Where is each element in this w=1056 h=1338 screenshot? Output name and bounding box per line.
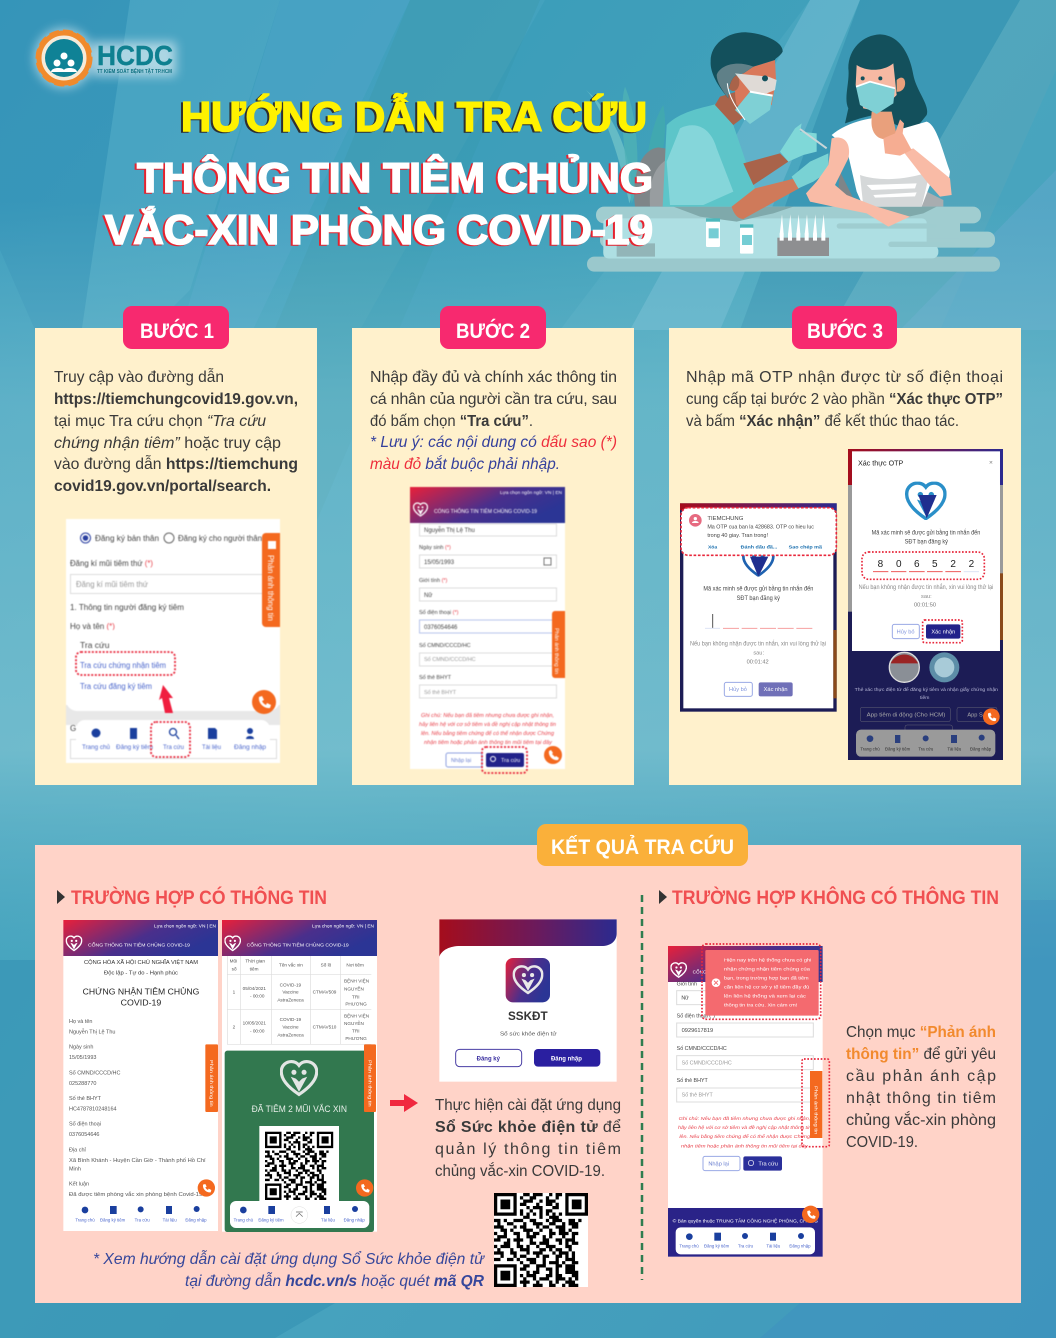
patient bbox=[806, 34, 952, 227]
screenshot: vaccination certificate: Ngày sinh bbox=[69, 1045, 93, 1051]
screenshot: no information found: Trang chủ bbox=[679, 1244, 699, 1249]
screenshot: OTP entry: Nếu bạn không nhận được tin nhắn, xin vui lòng thử lại bbox=[859, 584, 993, 591]
tab: report information bbox=[552, 611, 565, 678]
screenshot: OTP entry: SĐT bạn đăng ký bbox=[905, 540, 948, 546]
screenshot: OTP received: Nếu bạn không nhận được tin nhắn, xin vui lòng thử lại bbox=[690, 641, 826, 648]
alert: not found: lên liên hệ thống và xem lại các bbox=[724, 994, 807, 999]
screenshot: OTP entry: 5 bbox=[932, 559, 938, 570]
screenshot: vaccination table and green pass: Đăng nhập bbox=[344, 1217, 365, 1222]
table: doses: Tên vắc xin bbox=[279, 962, 303, 968]
table: doses: BỆNH VIỆN bbox=[344, 1011, 369, 1018]
screenshot: OTP received: Xác nhận bbox=[764, 687, 788, 693]
bottom navigation: Đăng ký tiêm bbox=[116, 744, 153, 751]
table: doses: - 00:00 bbox=[250, 1028, 265, 1033]
screenshot: step 2 lookup form: Lựa chọn ngôn ngữ: VN | EN bbox=[500, 490, 562, 495]
table: doses: CTMAV509 bbox=[313, 990, 337, 995]
screenshot: vaccination certificate: Địa chỉ bbox=[69, 1146, 87, 1153]
screenshot: OTP entry: Đăng nhập bbox=[970, 746, 992, 751]
panel: step 1 bbox=[35, 306, 317, 785]
note: red warning text bbox=[678, 1115, 812, 1150]
screenshot: OTP received: Hủy bỏ bbox=[729, 686, 747, 693]
screenshot: OTP received: 00:01:42 bbox=[747, 660, 769, 666]
screenshot: step 1 registration page: Họ và tên (*) bbox=[70, 622, 115, 631]
table: doses: BỆNH VIỆN bbox=[344, 977, 369, 984]
screenshot: step 2 lookup form bbox=[410, 487, 565, 773]
text: step 1 instructions bbox=[54, 367, 298, 495]
icon: phone button bbox=[544, 746, 562, 764]
screenshot: vaccination certificate: Phản ánh thông tin bbox=[209, 1060, 214, 1107]
screenshot: OTP entry bbox=[848, 449, 1003, 760]
screenshot: step 2 lookup form: 15/05/1993 bbox=[424, 560, 455, 566]
screenshot: OTP entry: 8 bbox=[878, 559, 884, 570]
bottom navigation: Gi bbox=[70, 724, 78, 733]
tab: report information bbox=[262, 533, 280, 627]
bottom navigation: Tài liệu bbox=[202, 744, 221, 751]
screenshot: vaccination certificate: Số thẻ BHYT bbox=[69, 1096, 102, 1102]
screenshot: step 2 lookup form: Giới tính (*) bbox=[419, 578, 448, 584]
screenshot: step 1 registration page bbox=[66, 519, 280, 763]
screenshot: step 2 lookup form: Số thẻ BHYT bbox=[419, 675, 452, 681]
notification: OTP message: Ma OTP cua ban la 428683. OTP co hieu luc bbox=[707, 525, 814, 531]
text: step 2 instructions: cá nhân của người cần tra cứu, sau bbox=[370, 391, 617, 408]
screenshot: vaccination table and green pass: Trang chủ bbox=[234, 1217, 254, 1222]
popup: lookup menu: Tra cứu đăng ký tiêm bbox=[80, 682, 152, 691]
screenshot: vaccination certificate: CỘNG HÒA XÃ HỘI CHỦ NGHĨA VIỆT NAM bbox=[84, 958, 198, 966]
text: step 3 instructions bbox=[686, 369, 1003, 430]
tab: report information: Phản ánh thông tin bbox=[813, 1086, 819, 1135]
notification: OTP message: trong 40 giay. Tran trong! bbox=[707, 533, 768, 539]
text: step 1 instructions: tại mục Tra cứu chọn “Tra cứu bbox=[54, 413, 266, 430]
screenshot: vaccination table and green pass: Phản ánh thông tin bbox=[367, 1060, 372, 1107]
text: install app: chủng vắc-xin COVID-19. bbox=[435, 1161, 605, 1180]
screenshot: no information found: © Bản quyền thuộc TRUNG TÂM CÔNG NGHỆ PHÒNG, CHỐNG bbox=[673, 1217, 818, 1224]
QR code: app guide bbox=[494, 1193, 588, 1287]
screenshot: OTP entry: tiêm bbox=[920, 695, 929, 701]
screenshot: vaccination certificate: 025288770 bbox=[69, 1081, 96, 1087]
screenshot: step 2 lookup form: Số điện thoại (*) bbox=[419, 610, 459, 616]
alert: not found: bạn, trong trường hợp bạn đã tiêm bbox=[724, 976, 809, 981]
screenshot: step 1 registration page: Đăng ký cho người thân bbox=[178, 534, 262, 543]
buttons: reset and search: Nhập lại bbox=[451, 758, 471, 764]
screenshot: vaccination certificate: Xã Bình Khánh - Huyện Cần Giờ - Thành phố Hồ Chí bbox=[69, 1158, 206, 1164]
screenshot: step 1 registration page: Đăng ký bản thân bbox=[95, 534, 159, 543]
text: step 1 instructions: https://tiemchungcovid19.gov.vn, bbox=[54, 391, 298, 408]
screenshot: vaccination certificate: Lựa chọn ngôn ngữ: VN | EN bbox=[154, 923, 216, 928]
text: report advice: nhật thông tin tiêm bbox=[846, 1090, 996, 1107]
text: step 1 instructions: covid19.gov.vn/portal/search. bbox=[54, 478, 271, 495]
screenshot: step 2 lookup form: Số CMND/CCCD/HC bbox=[424, 657, 476, 663]
screenshot: OTP entry: 6 bbox=[914, 559, 920, 570]
alert: not found bbox=[702, 944, 821, 1019]
table: doses: 2 bbox=[233, 1024, 236, 1029]
icon: phone button bbox=[252, 690, 276, 714]
screenshot: SSKDT app: Đăng nhập bbox=[551, 1057, 582, 1063]
text: step 1 instructions: vào đường dẫn https://tiemchung bbox=[54, 454, 298, 473]
note: red warning text: lên. Nếu bằng tiêm chứng để có thể nhận được Chứng bbox=[421, 730, 554, 737]
screenshot: vaccination table and green pass: Lựa chọn ngôn ngữ: VN | EN bbox=[312, 923, 374, 928]
note: red warning text: hãy liên hệ với cơ sở tiêm và đề nghị cập nhật thông tin bbox=[678, 1124, 812, 1131]
plant bbox=[586, 87, 680, 205]
buttons: reset and search: Tra cứu bbox=[501, 758, 520, 764]
badge: results: KẾT QUẢ TRA CỨU bbox=[551, 835, 734, 859]
table: doses: CTMAV510 bbox=[313, 1025, 337, 1030]
screenshot: no information found: Số thẻ BHYT bbox=[677, 1078, 709, 1084]
screenshot: OTP received: SĐT bạn đăng ký bbox=[737, 596, 780, 602]
screenshot: SSKDT app: Sổ sức khỏe điện tử bbox=[500, 1031, 557, 1038]
table: doses: NGUYỄN bbox=[344, 985, 364, 991]
note: red warning text: nhận tiêm hoặc phản ánh thông tin mũi tiêm tại đây bbox=[424, 739, 553, 746]
footnote: tại đường dẫn hcdc.vn/s hoặc quét mã QR bbox=[185, 1271, 484, 1290]
panel: step 3 bbox=[669, 306, 1021, 785]
screenshot: OTP entry: 2 bbox=[950, 559, 956, 570]
table: doses: TRI bbox=[352, 1029, 360, 1034]
screenshot: SSKDT app: Đăng ký bbox=[477, 1057, 501, 1063]
card: fully vaccinated pass bbox=[225, 1051, 374, 1232]
doctor bbox=[663, 32, 828, 219]
screenshot: OTP entry: Đăng ký tiêm bbox=[885, 746, 911, 751]
screenshot: OTP entry: Xác nhận bbox=[931, 629, 955, 635]
screenshot: step 2 lookup form: Số CMND/CCCD/HC bbox=[419, 643, 471, 649]
text: report advice bbox=[846, 1024, 996, 1151]
tab: report information: Phản ánh thông tin bbox=[553, 628, 559, 674]
screenshot: OTP entry: App tiêm di động (Cho HCM) bbox=[867, 712, 945, 718]
alert: not found: cần liên hệ cơ sở y tế tiêm đầy đủ bbox=[724, 984, 810, 990]
screenshot: step 2 lookup form: CỔNG THÔNG TIN TIÊM CHỦNG COVID-19 bbox=[434, 507, 537, 515]
screenshot: vaccination certificate: COVID-19 bbox=[121, 997, 162, 1007]
screenshot: vaccination certificate: Trang chủ bbox=[75, 1217, 95, 1222]
screenshot: step 2 lookup form: Nữ bbox=[424, 593, 432, 599]
screenshot: no information found: Nhập lại bbox=[708, 1161, 729, 1167]
screenshot: step 1 registration page: Đăng kí mũi tiêm thứ (*) bbox=[70, 559, 153, 568]
screenshot: vaccination table and green pass bbox=[222, 920, 377, 1232]
popup: lookup menu: Tra cứu bbox=[80, 640, 110, 650]
screenshot: vaccination certificate: Đăng nhập bbox=[185, 1217, 207, 1222]
text: report advice: chủng vắc-xin phòng bbox=[846, 1110, 996, 1129]
screenshot: OTP entry: 0 bbox=[896, 559, 902, 570]
vials and swabs bbox=[706, 214, 829, 256]
table: doses: Số lô bbox=[321, 963, 332, 968]
screenshot: OTP entry: × bbox=[989, 460, 993, 467]
screenshot: no information found bbox=[668, 944, 829, 1257]
screenshot: vaccination certificate: 15/05/1993 bbox=[69, 1055, 96, 1061]
text: step 3 instructions: và bấm “Xác nhận” để kết thúc thao tác. bbox=[686, 412, 959, 430]
screenshot: vaccination table and green pass: CỔNG THÔNG TIN TIÊM CHỦNG COVID-19 bbox=[247, 940, 349, 947]
alert: not found: Hiện nay trên hệ thống chưa có ghi bbox=[724, 958, 811, 963]
text: report advice: thông tin” để gửi yêu bbox=[846, 1045, 996, 1063]
screenshot: vaccination certificate: Số CMND/CCCD/HC bbox=[69, 1070, 121, 1076]
screenshot: OTP entry: Hủy bỏ bbox=[897, 628, 915, 635]
text: step 2 instructions: Nhập đầy đủ và chính xác thông tin bbox=[370, 369, 617, 386]
table: doses: NGUYỄN bbox=[344, 1020, 364, 1026]
table: doses: 1 bbox=[233, 990, 236, 995]
popup: lookup menu bbox=[66, 630, 280, 725]
table: doses: COVID-19 bbox=[280, 1017, 302, 1022]
table: doses: Vaccine bbox=[282, 990, 299, 995]
badge: results bbox=[537, 824, 748, 866]
screenshot: no information found: Số CMND/CCCD/HC bbox=[677, 1046, 727, 1052]
text: install app: Sổ Sức khỏe điện tử để bbox=[435, 1118, 621, 1136]
screenshot: no information found: CỔNG bbox=[693, 968, 707, 974]
screenshot: OTP entry: App S bbox=[967, 712, 983, 718]
screenshot: OTP entry: 00:01:50 bbox=[914, 603, 936, 609]
screenshot: vaccination certificate: Họ và tên bbox=[69, 1019, 92, 1025]
text: install app bbox=[435, 1097, 621, 1180]
screenshot: OTP received: Mã xác minh sẽ được gửi bằng tin nhắn đến bbox=[703, 586, 813, 593]
screenshot: vaccination certificate: Nguyễn Thị Lệ Thu bbox=[69, 1029, 115, 1036]
icon: SSKDT bbox=[506, 958, 550, 1002]
screenshot: vaccination certificate: CHỨNG NHẬN TIÊM CHỦNG bbox=[83, 986, 200, 997]
text: step 2 instructions bbox=[370, 369, 617, 473]
table: doses: Vaccine bbox=[282, 1025, 299, 1030]
table: doses: AstraZeneca bbox=[277, 1033, 304, 1038]
screenshot: no information found: Số CMND/CCCD/HC bbox=[682, 1060, 732, 1066]
screenshot: step 2 lookup form: 0376054646 bbox=[424, 625, 458, 631]
screenshot: OTP entry: Tra cứu bbox=[918, 746, 934, 751]
table bbox=[587, 207, 1000, 272]
card: fully vaccinated pass: ĐÃ TIÊM 2 MŨI VẮC XIN bbox=[252, 1104, 347, 1114]
text: report advice: COVID-19. bbox=[846, 1134, 918, 1151]
badge: step 2 bbox=[440, 306, 546, 349]
footnote bbox=[93, 1249, 486, 1290]
screenshot: vaccination table and green pass: Tài liệu bbox=[321, 1217, 336, 1222]
alert: not found: thông tin tra cứu. Xin cám ơn! bbox=[724, 1003, 797, 1008]
screenshot: OTP received: sau: bbox=[753, 651, 764, 657]
table: doses: PHƯƠNG bbox=[345, 1036, 367, 1041]
notification: OTP message: Sao chép mã bbox=[789, 545, 822, 551]
text: step 2 instructions: đó bấm chọn “Tra cứu”. bbox=[370, 413, 533, 430]
badge: step 2: BƯỚC 2 bbox=[456, 319, 530, 343]
logo: HCDC bbox=[34, 28, 176, 88]
table: doses: Thời gian bbox=[245, 959, 265, 964]
bottom navigation: Tra cứu bbox=[163, 744, 184, 751]
table: doses: Mũi bbox=[230, 959, 237, 964]
bottom navigation bbox=[70, 720, 276, 758]
table: doses: COVID-19 bbox=[280, 982, 302, 987]
screenshot: step 2 lookup form: Nguyễn Thị Lệ Thu bbox=[424, 527, 475, 534]
screenshot: step 2 lookup form: Số thẻ BHYT bbox=[424, 690, 457, 696]
table: doses: - 00:00 bbox=[250, 994, 265, 999]
screenshot: OTP entry: Trang chủ bbox=[860, 746, 880, 751]
screenshot: vaccination certificate: Kết luận bbox=[69, 1182, 89, 1188]
notification: OTP message: Đánh dấu đã... bbox=[741, 544, 778, 551]
note: red warning text: hãy liên hệ với cơ sở tiêm và đề nghị cập nhật thông tin bbox=[419, 721, 556, 728]
note: red warning text: Ghi chú: Nếu bạn đã tiêm nhưng chưa được ghi nhận, bbox=[421, 712, 554, 719]
screenshot: OTP entry: sau: bbox=[921, 594, 932, 600]
screenshot: no information found: Đăng nhập bbox=[789, 1244, 811, 1249]
screenshot: OTP received bbox=[680, 503, 837, 712]
screenshot: no information found: Tra cứu bbox=[738, 1244, 754, 1249]
table: doses: tiêm bbox=[250, 966, 259, 971]
illustration: vaccination scene bbox=[586, 32, 1000, 272]
title bbox=[105, 92, 653, 253]
note: red warning text: Ghi chú: Nếu bạn đã tiêm nhưng chưa được ghi nhận, bbox=[679, 1115, 810, 1122]
tab: report information: Phản ánh thông tin bbox=[266, 555, 275, 621]
screenshot: no information found: Giới tính bbox=[677, 981, 697, 987]
text: install app: quản lý thông tin tiêm bbox=[435, 1141, 621, 1158]
bottom navigation: Đăng nhập bbox=[234, 744, 266, 751]
title: THÔNG TIN TIÊM CHỦNG bbox=[137, 153, 653, 201]
text: step 1 instructions: Truy cập vào đường dẫn bbox=[54, 367, 224, 386]
logo: HCDC: HCDC bbox=[97, 40, 173, 71]
note: red warning text: lên. Nếu bằng tiêm chứng để có thể nhận được Chứng bbox=[679, 1133, 810, 1140]
text: step 2 instructions: màu đỏ bắt buộc phải nhập. bbox=[370, 454, 560, 473]
screenshot: SSKDT app: SSKĐT bbox=[508, 1009, 548, 1023]
panel: step 2 bbox=[352, 306, 634, 785]
screenshot: no information found: Số thẻ BHYT bbox=[682, 1093, 714, 1099]
note: red warning text bbox=[419, 712, 556, 746]
screenshot: no information found: Tài liệu bbox=[766, 1244, 781, 1249]
screenshot: no information found: Tra cứu bbox=[758, 1161, 778, 1167]
screenshot: no information found: Đăng ký tiêm bbox=[704, 1244, 730, 1249]
screenshot: vaccination certificate bbox=[63, 920, 218, 1231]
screenshot: OTP entry: Xác thực OTP bbox=[858, 460, 904, 467]
table: doses: 05/04/2021 bbox=[243, 986, 266, 991]
table: doses: TRI bbox=[352, 994, 360, 999]
screenshot: OTP entry: Tài liệu bbox=[947, 746, 962, 751]
panel: lookup results bbox=[35, 824, 1021, 1303]
tab: report information bbox=[802, 1059, 829, 1147]
screenshot: step 2 lookup form: Ngày sinh (*) bbox=[419, 545, 451, 551]
screenshot: no information found: 0929617819 bbox=[682, 1028, 713, 1034]
title: VẮC-XIN PHÒNG COVID-19 bbox=[105, 205, 653, 253]
note: red warning text: nhận tiêm hoặc phản ánh thông tin mũi tiêm tại đây bbox=[681, 1143, 808, 1150]
table: doses: AstraZeneca bbox=[277, 998, 304, 1003]
screenshot: vaccination certificate: Minh bbox=[69, 1167, 81, 1173]
screenshot: OTP entry: Mã xác minh sẽ được gửi bằng tin nhắn đến bbox=[872, 529, 980, 536]
screenshot: vaccination certificate: 0376054646 bbox=[69, 1132, 100, 1138]
logo: HCDC: TT KIỂM SOÁT BỆNH TẬT TP.HCM bbox=[97, 67, 172, 75]
text: step 1 instructions: chứng nhận tiêm” hoặc truy cập bbox=[54, 435, 281, 452]
screenshot: no information found: Nữ bbox=[681, 996, 689, 1002]
text: step 2 instructions: * Lưu ý: các nội dung có dấu sao (*) bbox=[370, 434, 617, 451]
screenshot: OTP entry: Thẻ xác thực điện tử để đăng ký tiêm và nhận giấy chứng nhận bbox=[855, 686, 998, 693]
popup: lookup menu: Tra cứu chứng nhận tiêm bbox=[80, 661, 166, 670]
text: step 3 instructions: Nhập mã OTP nhận được từ số điện thoại bbox=[686, 369, 1003, 386]
table: doses: 10/05/2021 bbox=[243, 1021, 266, 1026]
badge: step 1: BƯỚC 1 bbox=[140, 319, 214, 343]
screenshot: vaccination certificate: Số điện thoại bbox=[69, 1122, 101, 1128]
screenshot: step 1 registration page: 1. Thông tin người đăng ký tiêm bbox=[70, 603, 184, 612]
title: HƯỚNG DẪN TRA CỨU bbox=[181, 92, 647, 140]
heading: no information: TRƯỜNG HỢP KHÔNG CÓ THÔNG TIN bbox=[672, 885, 999, 909]
badge: step 3 bbox=[792, 306, 897, 349]
screenshot: vaccination certificate: Tài liệu bbox=[163, 1217, 177, 1222]
text: report advice: cầu phản ánh cập bbox=[846, 1068, 996, 1085]
screenshot: no information found: Số điện thoại (*) bbox=[677, 1014, 715, 1020]
screenshot: vaccination certificate: HC4787810248164 bbox=[69, 1106, 117, 1112]
chair bbox=[634, 147, 678, 207]
notification: OTP message: Xóa bbox=[708, 545, 717, 551]
screenshot: vaccination certificate: CỔNG THÔNG TIN TIÊM CHỦNG COVID-19 bbox=[88, 940, 190, 947]
screenshot: vaccination certificate: Đăng ký tiêm bbox=[100, 1217, 126, 1222]
notification: OTP message: TIEMCHUNG bbox=[707, 516, 743, 522]
screenshot: vaccination certificate: Đã được tiêm phòng vắc xin phòng bệnh Covid-19 bbox=[69, 1191, 202, 1198]
table: doses: PHƯƠNG bbox=[345, 1002, 367, 1007]
table: doses bbox=[227, 956, 371, 1044]
screenshot: vaccination certificate: Độc lập - Tự do - Hạnh phúc bbox=[104, 970, 178, 976]
notification: OTP message bbox=[681, 508, 836, 555]
text: report advice: Chọn mục “Phản ánh bbox=[846, 1024, 996, 1041]
badge: step 1 bbox=[123, 306, 229, 349]
screenshot: OTP entry: 2 bbox=[969, 559, 975, 570]
table: doses: Nơi tiêm bbox=[346, 963, 364, 968]
screenshot: SSKDT app bbox=[439, 919, 617, 1082]
screenshot: vaccination table and green pass: Đăng ký tiêm bbox=[258, 1217, 284, 1222]
bottom navigation: Trang chủ bbox=[82, 743, 110, 751]
alert: not found: nhận chứng nhận tiêm chủng của bbox=[724, 966, 811, 972]
table: doses: số bbox=[232, 966, 237, 971]
heading: has information: TRƯỜNG HỢP CÓ THÔNG TIN bbox=[71, 885, 327, 909]
text: install app: Thực hiện cài đặt ứng dụng bbox=[435, 1097, 621, 1114]
footnote: * Xem hướng dẫn cài đặt ứng dụng Sổ Sức khỏe điện tử bbox=[93, 1249, 486, 1268]
screenshot: step 1 registration page: Đăng kí mũi tiêm thứ bbox=[76, 580, 149, 589]
screenshot: vaccination certificate: Tra cứu bbox=[135, 1217, 150, 1222]
buttons: reset and search bbox=[446, 747, 527, 773]
arrow: to app install bbox=[390, 1094, 418, 1112]
arrow: red pointing to menu item bbox=[159, 685, 173, 713]
badge: step 3: BƯỚC 3 bbox=[807, 319, 883, 343]
text: step 3 instructions: cung cấp tại bước 2 vào phần “Xác thực OTP” bbox=[686, 391, 1003, 408]
